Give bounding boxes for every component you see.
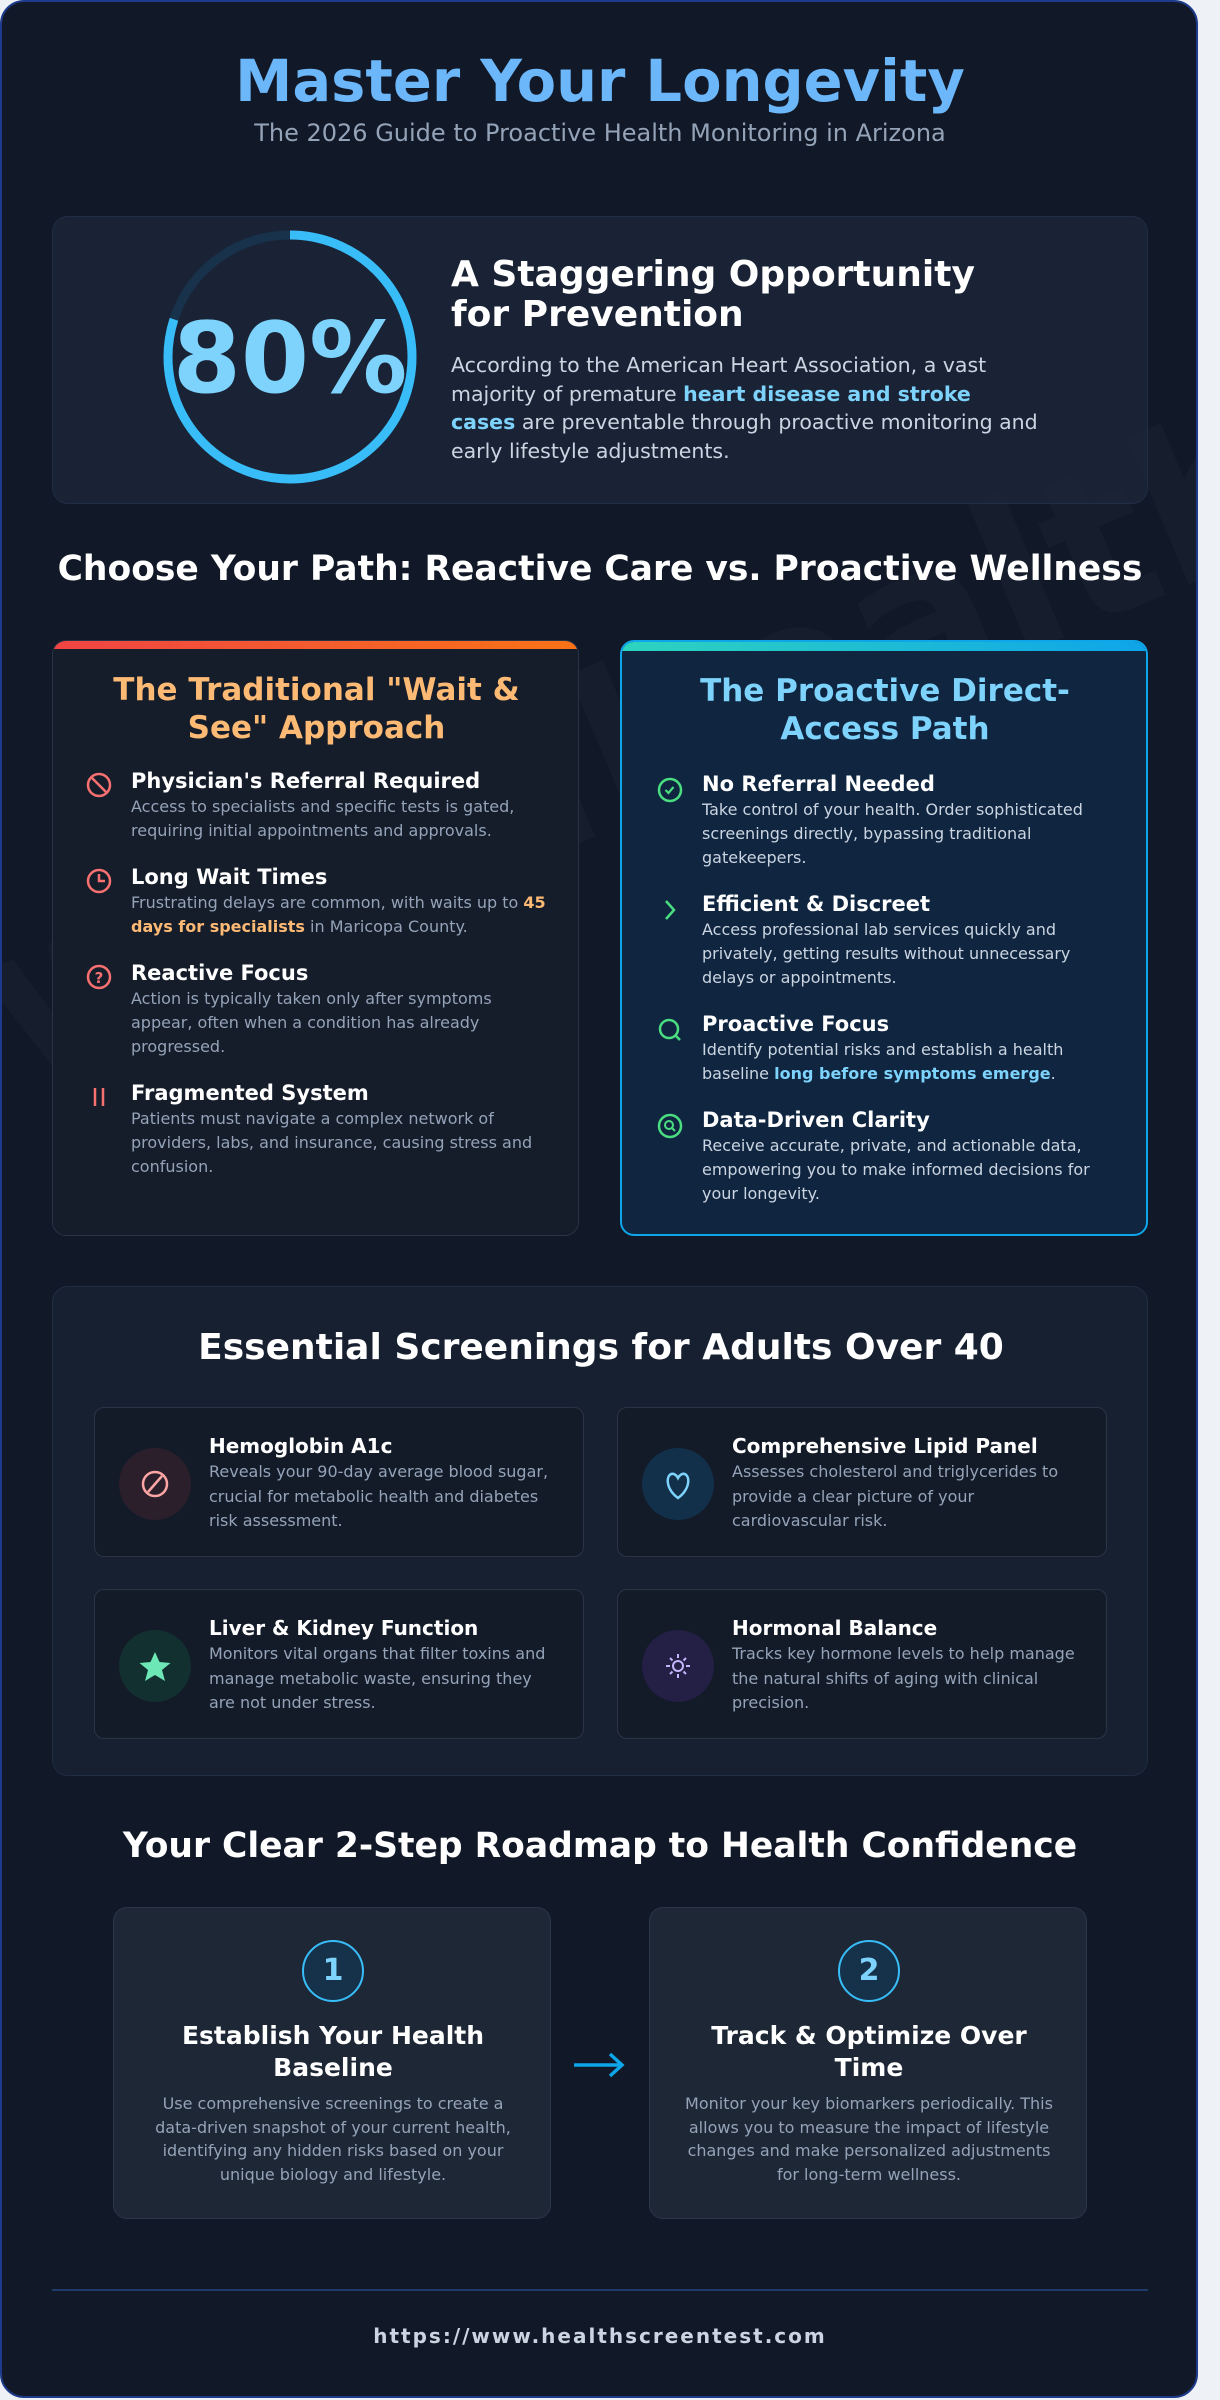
footer url: https://www.healthscreentest.com (373, 2324, 827, 2348)
item: wait times: Long Wait Times (131, 865, 327, 889)
screening: liver kidney: Liver & Kidney Function (209, 1616, 478, 1640)
screening: liver kidney: Monitors vital organs that filter toxins and manage metabolic waste, ensuring they are not under stress. (209, 1644, 545, 1712)
item: efficient: delays or appointments. (702, 968, 897, 987)
item: proactive focus (658, 1012, 1063, 1083)
screenings heading: Essential Screenings for Adults Over 40 (198, 1327, 1004, 1368)
item: no referral: screenings directly, bypassing traditional (702, 824, 1031, 843)
step 1: Use comprehensive screenings to create a data-driven snapshot of your current health, identifying any hidden risks based on your unique biology and lifestyle. (155, 2094, 511, 2184)
item: proactive focus: baseline long before symptoms emerge. (702, 1064, 1056, 1083)
section heading: path: Choose Your Path: Reactive Care vs. Proactive Wellness (58, 549, 1142, 589)
panel: traditional approach (52, 640, 579, 1236)
left heading: The Traditional "Wait & See" Approach (113, 672, 520, 746)
screening: lipid: Assesses cholesterol and triglycerides to provide a clear picture of your cardiovascular risk. (732, 1462, 1058, 1530)
step 1: Establish Your Health Baseline (182, 2021, 484, 2082)
item: referral: Physician's Referral Required (131, 769, 480, 793)
panel: screenings (52, 1286, 1148, 1776)
item: no referral: Take control of your health. Order sophisticated (702, 800, 1083, 819)
panel: stat (52, 216, 1148, 504)
item: fragmented (94, 1081, 532, 1176)
item: wait times: days for specialists in Maricopa County. (131, 917, 468, 936)
item: referral: requiring initial appointments and approvals. (131, 821, 492, 840)
item: efficient: Access professional lab services quickly and (702, 920, 1056, 939)
step 1 (113, 1907, 551, 2219)
item: fragmented: Patients must navigate a complex network of (131, 1109, 494, 1128)
stat paragraph: majority of premature heart disease and stroke (451, 382, 971, 406)
item: no referral (658, 772, 1083, 867)
panel: proactive path (620, 640, 1148, 1236)
item: reactive focus (86, 961, 492, 1056)
item: reactive focus: ? (95, 969, 103, 987)
section heading: roadmap: Your Clear 2-Step Roadmap to Health Confidence (123, 1826, 1077, 1866)
subtitle: The 2026 Guide to Proactive Health Monitoring in Arizona (254, 119, 946, 147)
step 2: 2 (859, 1953, 879, 1988)
step 2 (649, 1907, 1087, 2219)
screening: hormonal (617, 1589, 1107, 1739)
item: wait times (86, 865, 546, 936)
screening: A1c: Reveals your 90-day average blood sugar, crucial for metabolic health and diabetes risk assessment. (209, 1462, 548, 1530)
step 2: Track & Optimize Over Time (711, 2021, 1027, 2082)
item: data clarity: empowering you to make informed decisions for (702, 1160, 1090, 1179)
right heading: The Proactive Direct-Access Path (700, 673, 1070, 747)
screening: lipid (617, 1407, 1107, 1557)
item: reactive focus: progressed. (131, 1037, 225, 1056)
item: reactive focus: Action is typically taken only after symptoms (131, 989, 492, 1008)
arrow (574, 2052, 624, 2078)
item: data clarity: Receive accurate, private, and actionable data, (702, 1136, 1082, 1155)
item: fragmented: providers, labs, and insurance, causing stress and (131, 1133, 532, 1152)
item: fragmented: Fragmented System (131, 1081, 369, 1105)
chart: 80% ring (164, 230, 416, 484)
item: data clarity (658, 1108, 1090, 1203)
screening: liver kidney (94, 1589, 584, 1739)
item: reactive focus: appear, often when a condition has already (131, 1013, 479, 1032)
item: data clarity: Data-Driven Clarity (702, 1108, 930, 1132)
item: referral (86, 769, 514, 840)
item: wait times: Frustrating delays are common, with waits up to 45 (131, 893, 546, 912)
title: Master Your Longevity (235, 48, 965, 115)
chart: 80% ring: 80% (173, 302, 407, 416)
item: fragmented: confusion. (131, 1157, 213, 1176)
screening: hormonal: Hormonal Balance (732, 1616, 937, 1640)
stat paragraph: early lifestyle adjustments. (451, 438, 730, 462)
item: efficient: Efficient & Discreet (702, 892, 930, 916)
screening: lipid: Comprehensive Lipid Panel (732, 1434, 1038, 1458)
screening: hormonal: Tracks key hormone levels to help manage the natural shifts of aging with clinical precision. (732, 1644, 1075, 1712)
step 2: Monitor your key biomarkers periodically. This allows you to measure the impact of lifestyle changes and make personalized adjustments for long-term wellness. (685, 2094, 1053, 2184)
stat paragraph: According to the American Heart Association, a vast (451, 353, 986, 377)
item: proactive focus: Identify potential risks and establish a health (702, 1040, 1063, 1059)
step 1: 1 (323, 1953, 343, 1988)
screening: A1c (94, 1407, 584, 1557)
item: no referral: gatekeepers. (702, 848, 806, 867)
stat heading: A Staggering Opportunity for Prevention (451, 254, 975, 335)
item: efficient: privately, getting results without unnecessary (702, 944, 1070, 963)
item: proactive focus: Proactive Focus (702, 1012, 889, 1036)
stat paragraph: cases are preventable through proactive monitoring and (451, 410, 1038, 434)
item: referral: Access to specialists and specific tests is gated, (131, 797, 514, 816)
item: no referral: No Referral Needed (702, 772, 935, 796)
item: reactive focus: Reactive Focus (131, 961, 308, 985)
item: data clarity: your longevity. (702, 1184, 820, 1203)
item: efficient (665, 892, 1070, 987)
screening: A1c: Hemoglobin A1c (209, 1434, 392, 1458)
stat paragraph (451, 353, 1038, 462)
